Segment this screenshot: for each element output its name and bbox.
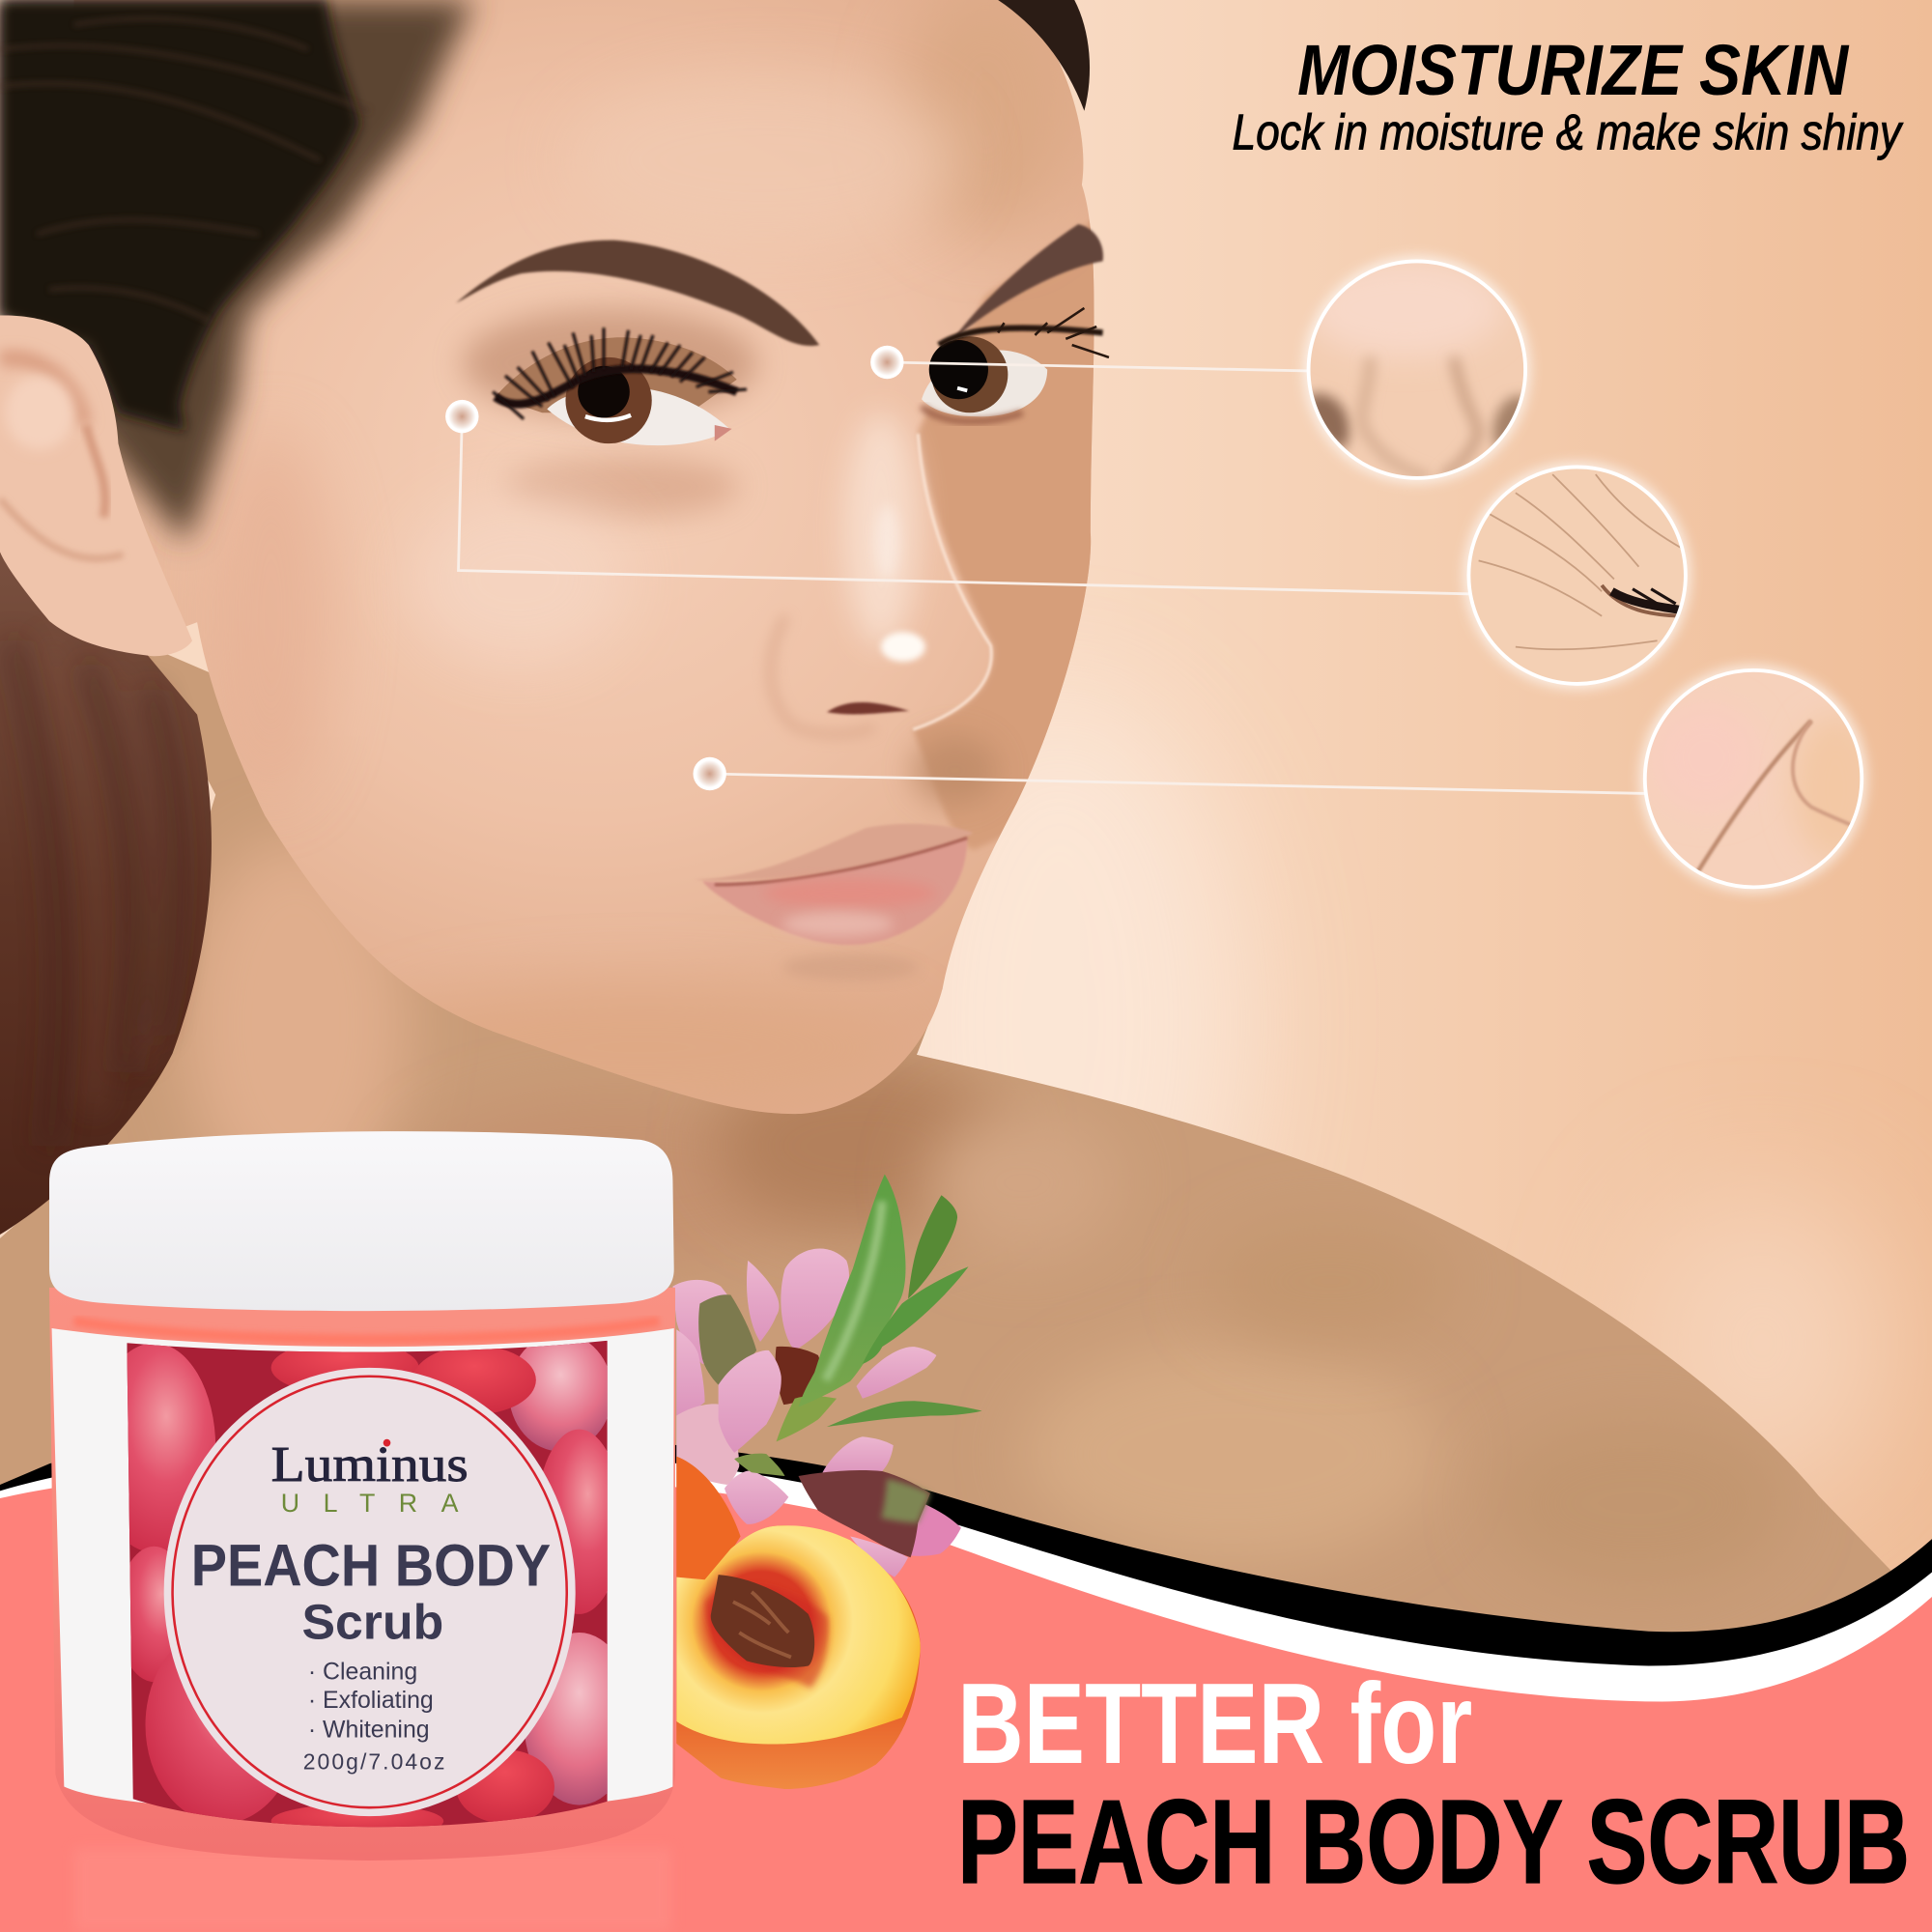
reflection [74,1848,671,1932]
benefits list [308,1659,434,1743]
jar gel highlight [74,1321,659,1339]
inset circle: eye wrinkles [1463,462,1690,689]
nostril [827,702,909,714]
product type: Scrub [301,1594,443,1649]
hair strands [0,18,370,321]
petals [672,1249,961,1577]
headline: moisturize skin: MOISTURIZE SKIN [1297,30,1850,110]
white band [0,1447,1932,1932]
net weight: 200g/7.04oz [303,1749,444,1775]
narrow leaves [908,1195,957,1298]
headline: moisturize skin [1233,30,1904,160]
callout dots [445,346,904,790]
brand name: Luminus [271,1436,469,1492]
inset circle: nose fold [1640,666,1879,892]
green bud [698,1294,756,1385]
dark flower centre [776,1347,822,1405]
far cheek shading [913,210,1109,850]
near eye [493,327,747,445]
stem [777,1396,837,1441]
benefits list: · Whitening [308,1716,430,1743]
brand subline: ULTRA [281,1489,459,1518]
hair below the ear [0,542,212,1235]
inset circle: between the brows [1303,256,1530,483]
coral wave panel [0,1430,1932,1932]
peach photo band [93,1333,635,1842]
bud green tip [881,1479,930,1523]
lips [694,824,974,945]
big leaf [799,1175,906,1407]
near eyebrow [456,241,819,346]
benefits list: · Cleaning [308,1659,417,1686]
flower sprig [672,1175,982,1577]
white label [52,1328,674,1812]
round badge [164,1368,576,1816]
leaf highlight [826,1202,882,1380]
lid [49,1131,674,1311]
front petal [719,1350,781,1453]
peach: back half [676,1457,741,1579]
hair: top, feathered edge [0,0,1090,542]
flower bud right [799,1470,930,1557]
brand dot [384,1439,390,1446]
benefits list: · Exfoliating [308,1687,434,1714]
ear [0,315,192,656]
callout lines [458,362,1646,793]
coral fill [0,1467,1932,1932]
black band [0,1430,1932,1932]
far eye [922,308,1109,421]
product name: PEACH BODY [191,1533,551,1599]
far eyebrow [952,224,1103,340]
shoulder and neck [0,655,1891,1633]
nose highlight [875,434,991,729]
slogan: better for: BETTER for [957,1661,1472,1788]
peach: cut half [676,1525,921,1789]
product jar [49,1131,675,1932]
jar body [49,1288,675,1861]
face [74,0,1109,1114]
small sepal [734,1454,784,1476]
